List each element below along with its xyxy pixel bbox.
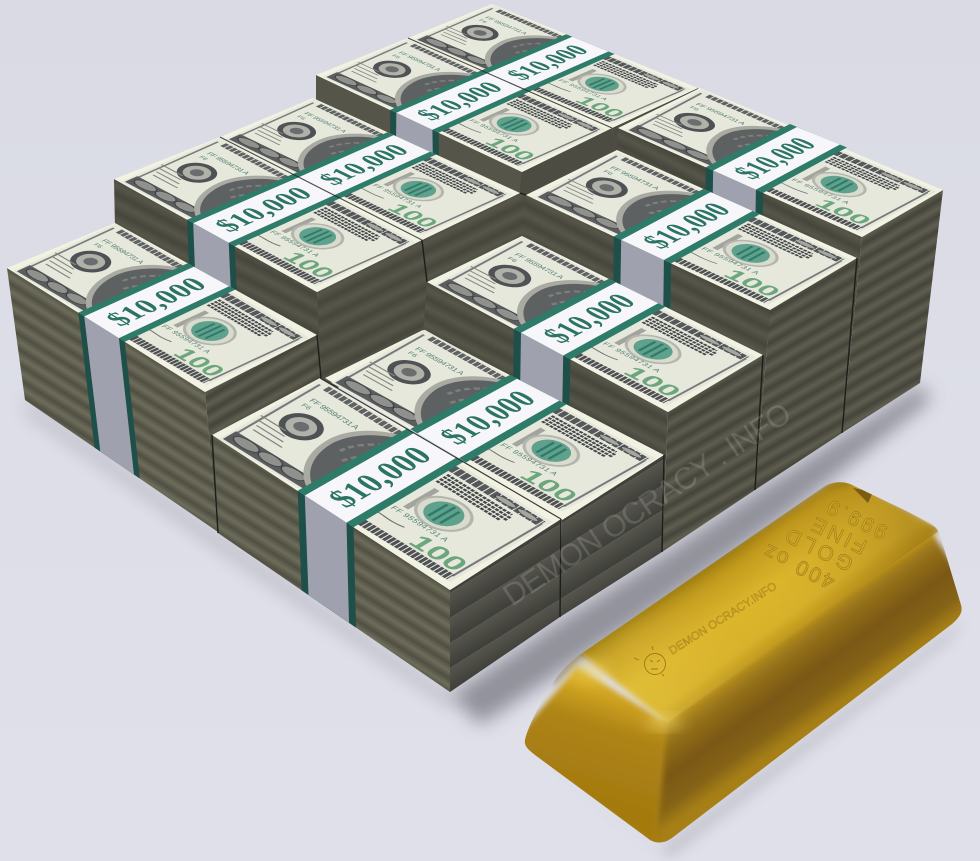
shadow under gold bar [526, 618, 965, 858]
gold bar: end face [524, 664, 667, 842]
engraving: gold: GOLD [782, 523, 857, 575]
stack: far right tall bundle [617, 88, 943, 433]
band label: $10,000 [635, 199, 739, 253]
band label: $10,000 [726, 134, 825, 183]
band label: $10,000 [409, 78, 510, 124]
stack: upper left row, left bundle [114, 137, 430, 395]
stack: rear row left bundle [316, 38, 618, 202]
stack: front row, rear bundle [325, 330, 664, 617]
stack: right row, second bundle [522, 150, 857, 490]
band label: $10,000 [534, 289, 644, 348]
gold bar: long side face [650, 532, 962, 842]
band label: $10,000 [208, 184, 320, 236]
band label: $10,000 [320, 442, 441, 513]
engraving: fine: FINE [808, 512, 870, 558]
band label: $10,000 [311, 140, 416, 189]
band label: $10,000 [99, 273, 214, 330]
icon: demon face logo [634, 646, 666, 676]
stack: far left tall bundle [7, 223, 325, 533]
stack: rear row right bundle [408, 4, 700, 155]
gold bar [524, 482, 962, 842]
floor shadow: left front of the stacks [25, 400, 452, 708]
stack: upper left row, right bundle [220, 98, 526, 340]
gold bar: top face [577, 475, 940, 723]
engraving: site name: DEMON OCRACY.INFO [667, 580, 779, 658]
floor shadow: right front of the stacks [450, 385, 930, 725]
watermark: DEMON OCRACY . INFO [496, 395, 798, 613]
band label: $10,000 [431, 385, 544, 449]
stack: front row, front bundle [212, 378, 561, 692]
stack: right row, third bundle [423, 236, 763, 552]
band label: $10,000 [501, 42, 596, 83]
engraving: weight: 400 oz [760, 539, 839, 593]
engraving: purity: 999.9 [824, 495, 891, 544]
